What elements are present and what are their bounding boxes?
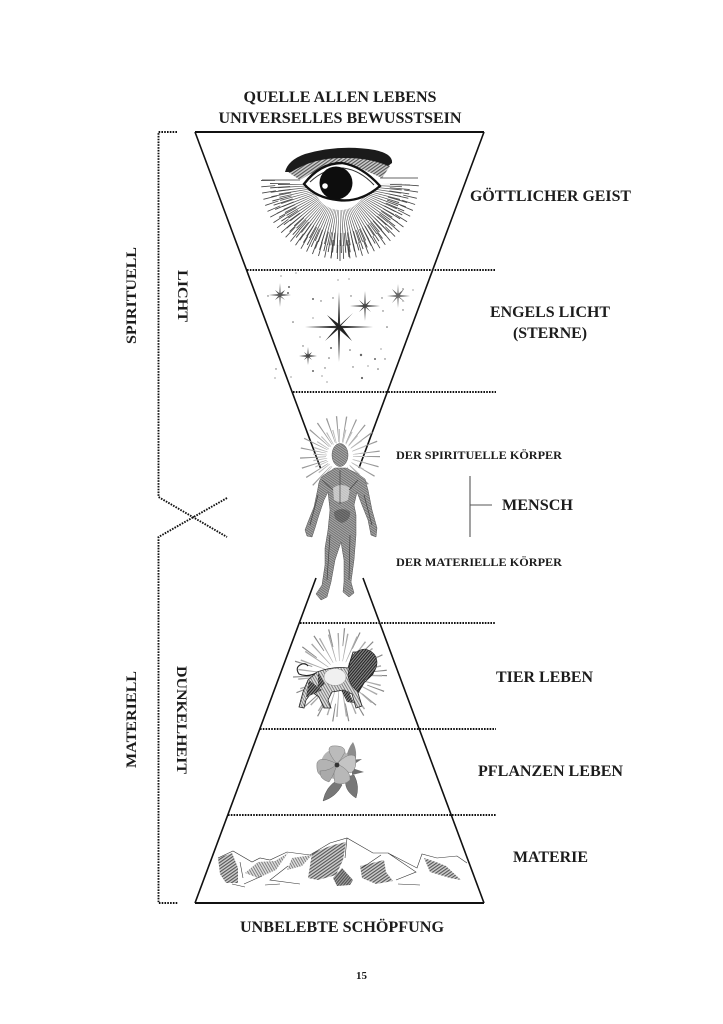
label: matter: MATERIE <box>513 849 588 866</box>
label: dunkelheit: DUNKELHEIT <box>173 666 189 774</box>
label: material body: DER MATERIELLE KÖRPER <box>396 555 562 569</box>
icon: radiant eye <box>262 148 418 261</box>
upper right star <box>350 291 380 321</box>
icon: stars <box>267 272 414 383</box>
upper inverted funnel <box>195 132 484 468</box>
label: mensch: MENSCH <box>502 497 574 514</box>
heading: source of all life: UNIVERSELLES BEWUSSTSEIN <box>218 110 462 127</box>
label: spiritual body: DER SPIRITUELLE KÖRPER <box>396 448 562 462</box>
far right star <box>387 284 410 308</box>
label: animal life: TIER LEBEN <box>496 669 593 686</box>
icon: mountain range <box>218 838 467 887</box>
label: spirituell: SPIRITUELL <box>124 247 140 344</box>
dotted bracket: spiritual and material <box>158 132 227 903</box>
connector bracket: human <box>470 476 492 537</box>
icon: human figure with halo <box>305 429 377 600</box>
label: engels licht: (STERNE) <box>513 325 587 342</box>
icon: radiant lion <box>297 637 378 713</box>
small star dots <box>267 272 414 383</box>
lower left star <box>299 347 317 365</box>
page number: 15 <box>356 970 368 982</box>
label: materiell: MATERIELL <box>124 671 140 768</box>
label: inanimate creation: UNBELEBTE SCHÖPFUNG <box>240 918 445 936</box>
lower pyramid <box>195 578 484 903</box>
heading: source of all life <box>218 89 462 127</box>
label: engels licht <box>490 304 610 342</box>
main star <box>305 292 373 362</box>
label: licht: LICHT <box>174 270 190 322</box>
label: plant life: PFLANZEN LEBEN <box>478 763 623 780</box>
icon: hibiscus flower <box>317 742 364 801</box>
dotted level dividers <box>228 270 496 815</box>
upper left star <box>269 283 291 307</box>
heading: source of all life: QUELLE ALLEN LEBENS <box>244 89 437 106</box>
label: engels licht: ENGELS LICHT <box>490 304 610 321</box>
label: goettlicher geist: GÖTTLICHER GEIST <box>470 187 631 205</box>
